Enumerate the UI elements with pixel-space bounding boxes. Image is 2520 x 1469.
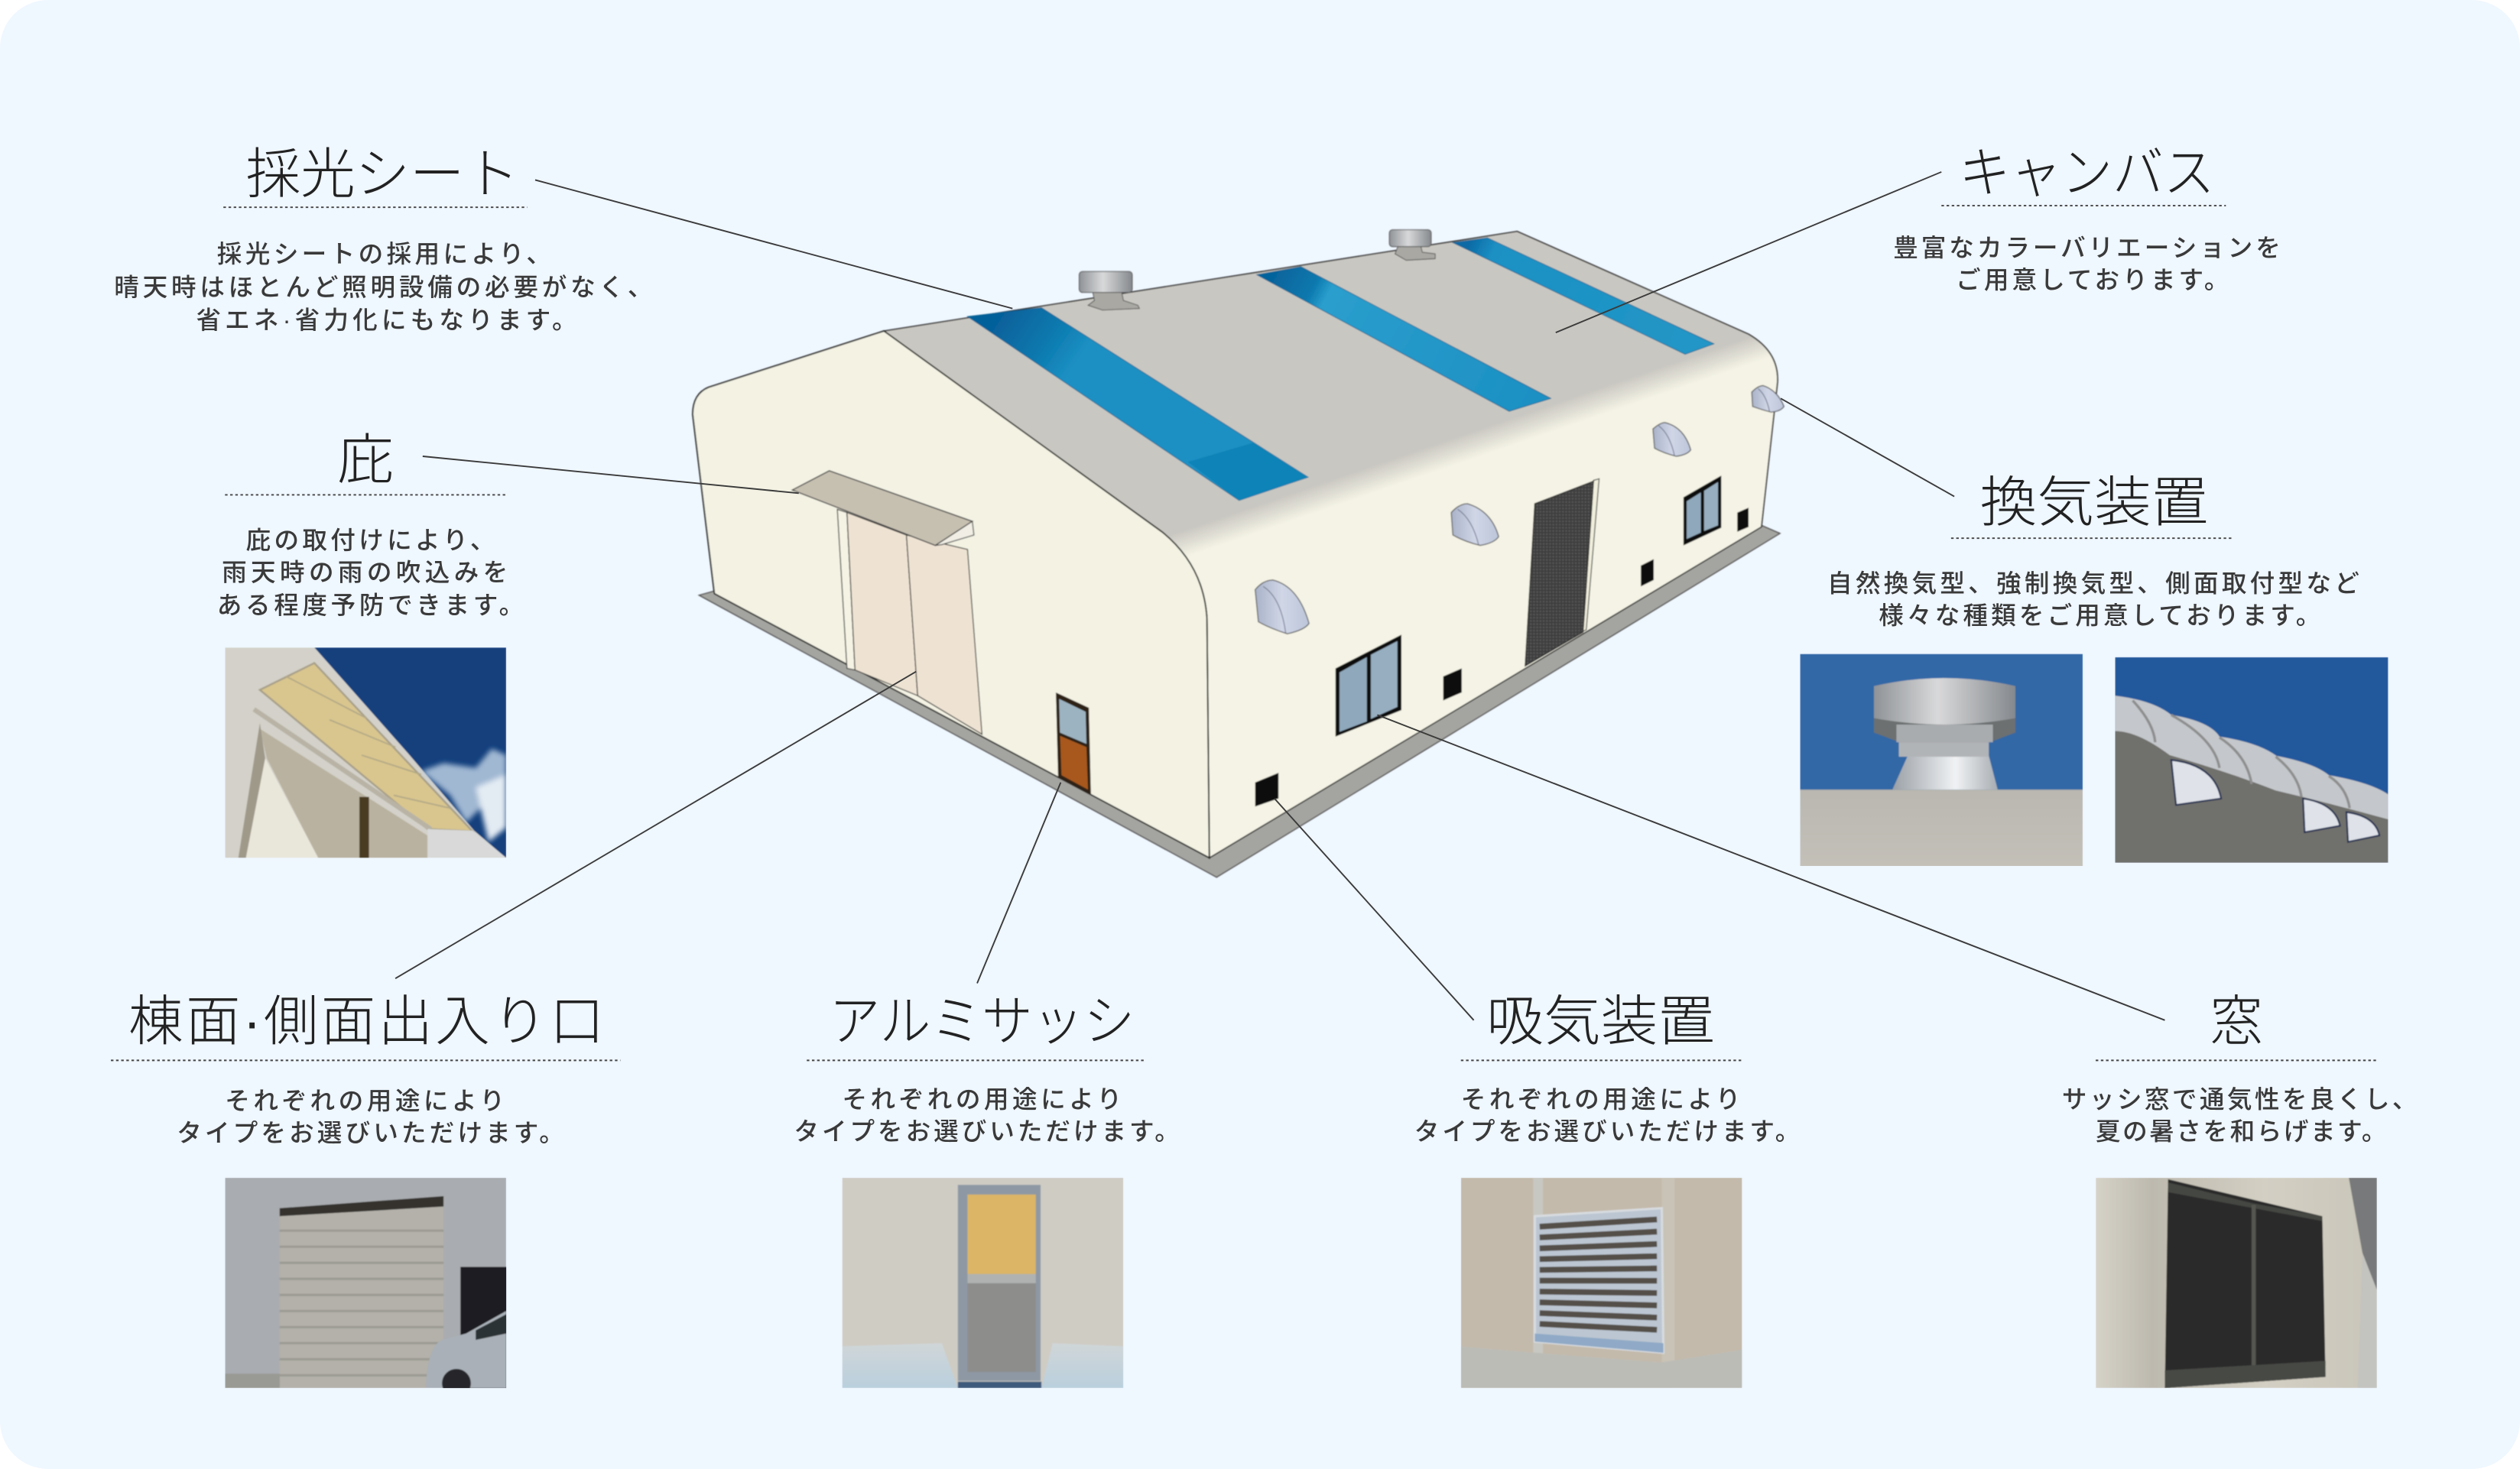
callout: 庇	[217, 430, 524, 858]
photo: canopy	[225, 647, 506, 858]
description: 雨天時の雨の吹込みを	[222, 559, 508, 586]
description: 庇の取付けにより、	[246, 527, 495, 554]
heading: 庇	[337, 430, 394, 491]
description: タイプをお選びいただけます。	[794, 1117, 1180, 1145]
building illustration	[693, 230, 1784, 877]
description: それぞれの用途により	[1461, 1085, 1741, 1113]
heading: 採光シート	[246, 144, 519, 205]
concrete slab	[699, 525, 1780, 877]
photo: roof ventilator	[1800, 654, 2083, 867]
photo: side hoods	[2115, 657, 2388, 863]
intake vents	[1255, 508, 1749, 806]
photo: aluminium door	[842, 1178, 1123, 1388]
description: タイプをお選びいただけます。	[177, 1120, 564, 1147]
shutter	[1525, 478, 1599, 666]
skylight 3	[1453, 238, 1714, 355]
skylight 2	[1257, 267, 1551, 411]
callout: 棟面・側面出入り口	[111, 991, 620, 1398]
description	[1827, 570, 2359, 630]
heading: キャンバス	[1959, 143, 2215, 204]
window 2	[1684, 475, 1721, 546]
window 1	[1336, 634, 1401, 737]
side hoods	[1255, 386, 1784, 634]
description	[1414, 1085, 1800, 1145]
heading: 窓	[2210, 991, 2263, 1052]
description: 自然換気型、強制換気型、側面取付型など	[1827, 570, 2359, 598]
description	[794, 1085, 1180, 1145]
heading: 棟面·側面出入り口	[128, 991, 604, 1052]
description: 様々な種類をご用意しております。	[1879, 602, 2320, 630]
photo: intake louver	[1461, 1178, 1742, 1388]
photo: sash window	[2096, 1178, 2377, 1388]
description	[177, 1087, 564, 1147]
skylight 1	[967, 308, 1308, 501]
roof ventilator 1	[1080, 271, 1139, 310]
callout: 吸気装置	[1414, 991, 1800, 1388]
callout: 窓	[2062, 991, 2417, 1388]
description: タイプをお選びいただけます。	[1414, 1117, 1800, 1145]
callout: 採光シート	[114, 144, 652, 334]
description: 省エネ·省力化にもなります。	[196, 306, 577, 334]
description: ご用意しております。	[1956, 266, 2229, 293]
description: 晴天時はほとんど照明設備の必要がなく、	[114, 274, 652, 301]
description	[114, 241, 652, 334]
description: それぞれの用途により	[842, 1085, 1122, 1113]
gable wall	[693, 331, 1210, 858]
callout: 換気装置	[1800, 472, 2388, 867]
description	[1893, 234, 2281, 293]
heading: アルミサッシ	[830, 991, 1135, 1052]
callout: アルミサッシ	[794, 991, 1180, 1388]
description	[217, 527, 524, 619]
description: サッシ窓で通気性を良くし、	[2062, 1085, 2417, 1113]
aluminium door	[1056, 692, 1091, 795]
description: 豊富なカラーバリエーションを	[1893, 234, 2281, 261]
photo: roller shutter	[225, 1178, 507, 1398]
description: ある程度予防できます。	[217, 592, 524, 619]
description	[2062, 1085, 2417, 1145]
canopy	[792, 471, 974, 546]
leader lines	[395, 172, 2164, 1020]
roof and side wall	[884, 232, 1778, 858]
hood inner curves	[1263, 389, 1769, 633]
description: 夏の暑さを和らげます。	[2096, 1117, 2387, 1145]
heading: 吸気装置	[1486, 991, 1715, 1052]
callout: キャンバス	[1893, 143, 2281, 293]
description: 採光シートの採用により、	[217, 241, 551, 268]
description: それぞれの用途により	[225, 1087, 505, 1114]
heading: 換気装置	[1980, 472, 2208, 533]
big door panels	[837, 509, 982, 734]
roof ventilator 2	[1389, 230, 1435, 261]
